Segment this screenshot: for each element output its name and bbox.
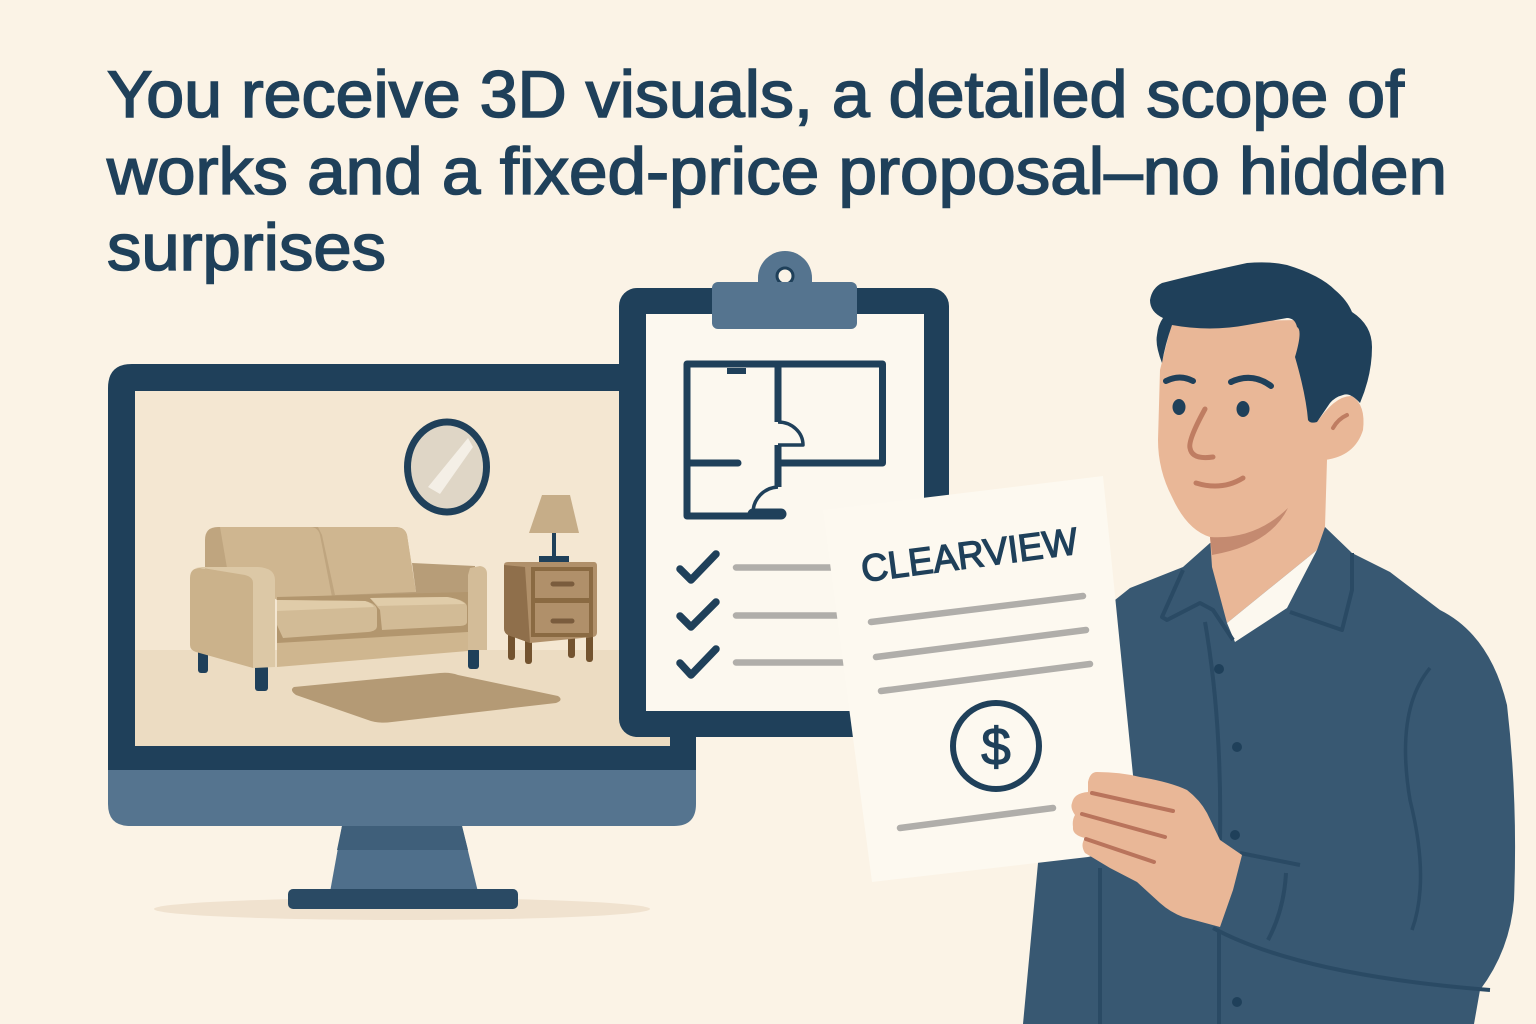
floor plan — [687, 364, 882, 516]
rug — [292, 673, 561, 723]
icon: dollar: $ — [981, 718, 1011, 777]
hand holding document — [1071, 772, 1242, 927]
neck and face — [1158, 320, 1327, 623]
ear — [1315, 396, 1364, 460]
torso — [1023, 527, 1515, 1024]
nightstand — [504, 562, 597, 664]
checklist — [680, 554, 850, 675]
person — [1023, 262, 1515, 1024]
title — [106, 57, 1447, 284]
company name: CLEARVIEW — [859, 521, 1080, 591]
buttons and seams — [1100, 622, 1490, 1024]
neck shadow — [1210, 508, 1288, 555]
title: works and a fixed-price proposal–no hidden — [106, 134, 1447, 208]
shirt collar — [1162, 550, 1352, 642]
mirror — [408, 422, 486, 512]
fixed-price proposal document — [823, 476, 1140, 882]
monitor shadow — [154, 898, 650, 920]
3D room render on screen — [135, 391, 670, 746]
monitor stand — [288, 826, 518, 909]
clipboard — [619, 251, 949, 737]
eyes, brows, nose, mouth — [1166, 378, 1271, 486]
monitor body — [108, 770, 696, 826]
lamp — [529, 495, 579, 562]
monitor — [108, 364, 696, 909]
icon: dollar — [953, 703, 1039, 789]
hair — [1150, 262, 1372, 423]
proposal lines — [871, 596, 1090, 828]
sofa — [190, 527, 487, 691]
title: You receive 3D visuals, a detailed scope of — [107, 57, 1405, 131]
clipboard clip — [712, 251, 857, 329]
title: surprises — [107, 210, 386, 284]
